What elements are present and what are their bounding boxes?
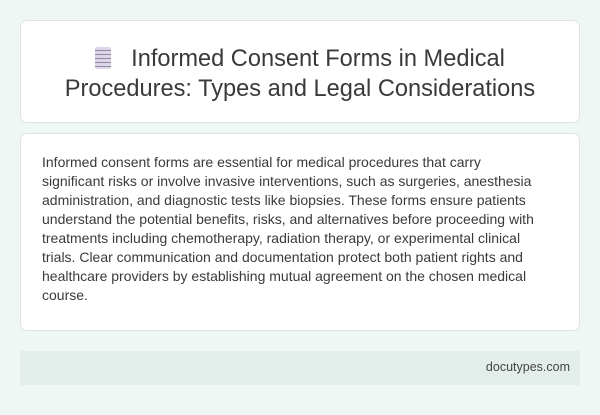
description text: understand the potential benefits, risks, and alternatives before proceeding with	[42, 211, 534, 227]
title: Informed Consent Forms in Medical	[131, 46, 505, 72]
title: Procedures: Types and Legal Considerations	[65, 76, 535, 102]
description text: treatments including chemotherapy, radiation therapy, or experimental clinical	[42, 230, 520, 246]
icon: document	[95, 47, 111, 69]
description text: trials. Clear communication and documentation protect both patient rights and	[42, 249, 523, 265]
description text: healthcare providers by establishing mutual agreement on the chosen medical	[42, 268, 526, 284]
description text: course.	[42, 287, 88, 303]
footer text: docutypes.com	[486, 360, 570, 374]
header card	[20, 20, 580, 123]
footer	[20, 351, 580, 385]
description text: Informed consent forms are essential for medical procedures that carry	[42, 154, 481, 170]
description text	[42, 154, 534, 303]
description text: significant risks or involve invasive interventions, such as surgeries, anesthesia	[42, 173, 531, 189]
description text: administration, and diagnostic tests like biopsies. These forms ensure patients	[42, 192, 526, 208]
body card	[20, 133, 580, 331]
title	[65, 46, 535, 102]
